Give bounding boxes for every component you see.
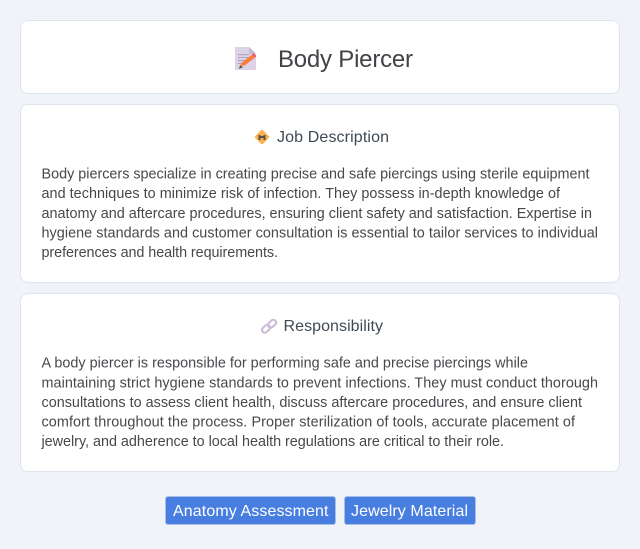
tag: anatomy assessment: Anatomy Assessment <box>173 503 329 520</box>
text block: job description: anatomy and aftercare procedures, ensuring client safety and satisfaction. Expertise in <box>42 206 592 222</box>
text block: responsibility: jewelry, and adherence to local health regulations are critical to their role. <box>40 434 504 450</box>
text block: job description <box>42 166 598 261</box>
panel: job description <box>20 104 620 283</box>
text block: responsibility: A body piercer is responsible for performing safe and precise piercings while <box>42 356 528 372</box>
text block: job description: hygiene standards and customer consultation is essential to tailor services to individual <box>42 226 598 242</box>
tag: jewelry material: Jewelry Material <box>351 503 468 520</box>
title: Body Piercer <box>278 46 413 73</box>
text block: job description: and techniques to minimize risk of infection. They possess in-depth knowledge of <box>42 186 561 202</box>
panel: responsibility <box>20 293 620 472</box>
tag: anatomy assessment <box>165 496 336 525</box>
text block: responsibility: comfort throughout the process. Proper sterilization of tools, accurate placement of <box>42 414 576 430</box>
panel: job description: Job Description <box>277 129 389 146</box>
panel: title card <box>20 20 620 94</box>
text block: responsibility: consultations to assess client health, discuss aftercare procedures, and ensure client <box>42 395 582 411</box>
tag: jewelry material <box>344 496 476 525</box>
icon: document with pencil <box>235 47 256 70</box>
icon: chain link <box>260 318 278 334</box>
text block: job description: preferences and health requirements. <box>42 245 278 261</box>
icon: orange diamond <box>254 130 270 144</box>
text block: responsibility: maintaining strict hygiene standards to prevent infections. They must conduct thorough <box>42 376 598 392</box>
text block: job description: Body piercers specialize in creating precise and safe piercings using sterile equipment <box>42 166 590 182</box>
panel: responsibility: Responsibility <box>284 318 383 335</box>
